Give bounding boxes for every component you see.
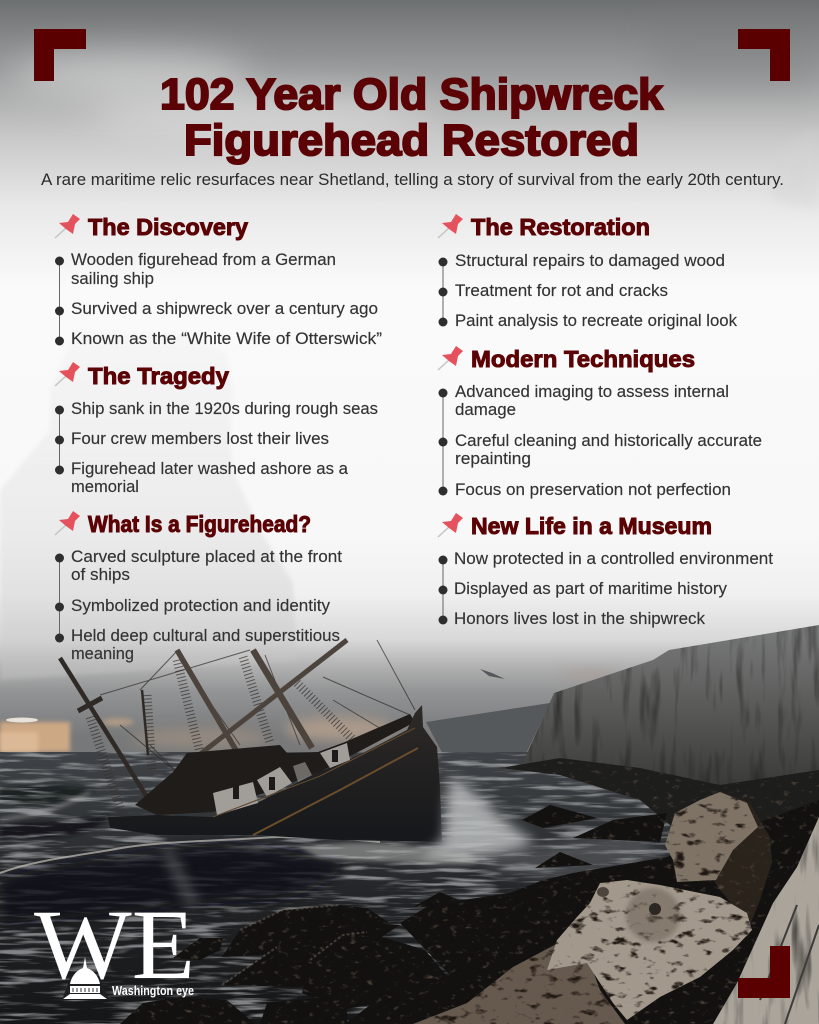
masts and rigging [60, 640, 415, 817]
timeline bullets [55, 256, 64, 346]
list text: Four crew members lost their lives [71, 430, 329, 448]
sunset glow on horizon [0, 670, 620, 752]
heading: The Discovery [88, 214, 248, 240]
list text: Displayed as part of maritime history [454, 580, 728, 598]
title [160, 70, 664, 165]
logo: Washington Eye [34, 889, 195, 1000]
list text: Advanced imaging to assess internal [455, 383, 729, 401]
panel: New Life in a Museum [438, 513, 773, 628]
list text: sailing ship [71, 270, 154, 288]
panel: Modern Techniques [438, 346, 762, 499]
icon: pin [438, 214, 463, 238]
timeline bullets [438, 258, 448, 326]
corner bracket: bottom right [738, 946, 790, 998]
shipwreck [60, 640, 442, 842]
timeline bullets [55, 554, 64, 642]
right cliff headland [500, 625, 819, 880]
list text: Survived a shipwreck over a century ago [71, 300, 378, 318]
icon: pin [55, 214, 80, 238]
sea with waves [0, 752, 819, 1024]
list text: Now protected in a controlled environment [454, 550, 773, 568]
list text: Symbolized protection and identity [71, 597, 331, 615]
timeline bullets [438, 388, 448, 496]
icon: capitol dome [62, 957, 109, 1000]
list text: Paint analysis to recreate original look [455, 312, 738, 330]
icon: pin [438, 346, 463, 370]
list text [71, 548, 342, 663]
head and neck [665, 792, 758, 882]
ghost statue silhouette behind text [0, 330, 297, 680]
list text: repainting [455, 450, 531, 468]
list text [71, 400, 378, 496]
list text: of ships [71, 566, 130, 584]
logo letters: WE [34, 889, 195, 1000]
white hull panels [213, 743, 350, 815]
chest shading [597, 887, 680, 942]
breaking waves and foam [300, 778, 660, 880]
list text: Honors lives lost in the shipwreck [454, 610, 706, 628]
timeline bullets [55, 406, 64, 474]
timeline bullets [438, 556, 448, 624]
distant cliff [426, 703, 550, 762]
upper deck [135, 714, 415, 815]
list text: Figurehead later washed ashore as a [71, 460, 349, 478]
logo wordmark: Washington eye [112, 984, 194, 998]
list text: Structural repairs to damaged wood [455, 252, 725, 270]
heading: The Tragedy [88, 363, 229, 389]
list text: damage [455, 401, 516, 419]
corner bracket: top left [34, 29, 86, 81]
list text [455, 252, 738, 330]
list text: Held deep cultural and superstitious [71, 627, 340, 645]
foreground rocks and shore [120, 800, 819, 1024]
torso [547, 880, 752, 1020]
rock edge highlights [222, 905, 367, 985]
panel: What Is a Figurehead? [55, 511, 342, 663]
hull panel windows [236, 750, 335, 799]
list text: Careful cleaning and historically accurate [455, 432, 762, 450]
list text: Ship sank in the 1920s during rough seas [71, 400, 378, 418]
list text [454, 550, 773, 628]
heading: The Restoration [471, 214, 650, 240]
title: Figurehead Restored [184, 116, 639, 165]
heading: Modern Techniques [471, 346, 695, 372]
hull plank stripe [253, 748, 418, 835]
heading: New Life in a Museum [471, 513, 712, 539]
corner bracket: top right [738, 29, 790, 81]
panel: The Discovery [55, 214, 382, 348]
list text [71, 251, 382, 348]
drapery [413, 942, 625, 1024]
subtitle: A rare maritime relic resurfaces near Shetland, telling a story of survival from the early 20th century. [41, 171, 784, 189]
figurehead statue [413, 791, 772, 1024]
list text [455, 383, 762, 499]
list text: Carved sculpture placed at the front [71, 548, 342, 566]
list text: meaning [71, 645, 134, 663]
list text: memorial [71, 478, 139, 496]
hair [700, 791, 772, 925]
icon: pin [55, 362, 80, 386]
icon: pin [55, 511, 80, 535]
hull [108, 705, 442, 842]
panel: The Tragedy [55, 362, 378, 496]
weathered hull plank [713, 817, 819, 1024]
panel: The Restoration [438, 214, 738, 330]
bird [480, 669, 505, 679]
list text: Treatment for rot and cracks [455, 282, 668, 300]
heading: What Is a Figurehead? [88, 511, 311, 537]
title: 102 Year Old Shipwreck [160, 70, 664, 119]
list text: Focus on preservation not perfection [455, 481, 731, 499]
list text: Wooden figurehead from a German [71, 251, 336, 269]
icon: pin [438, 513, 463, 537]
list text: Known as the “White Wife of Otterswick” [71, 330, 382, 348]
